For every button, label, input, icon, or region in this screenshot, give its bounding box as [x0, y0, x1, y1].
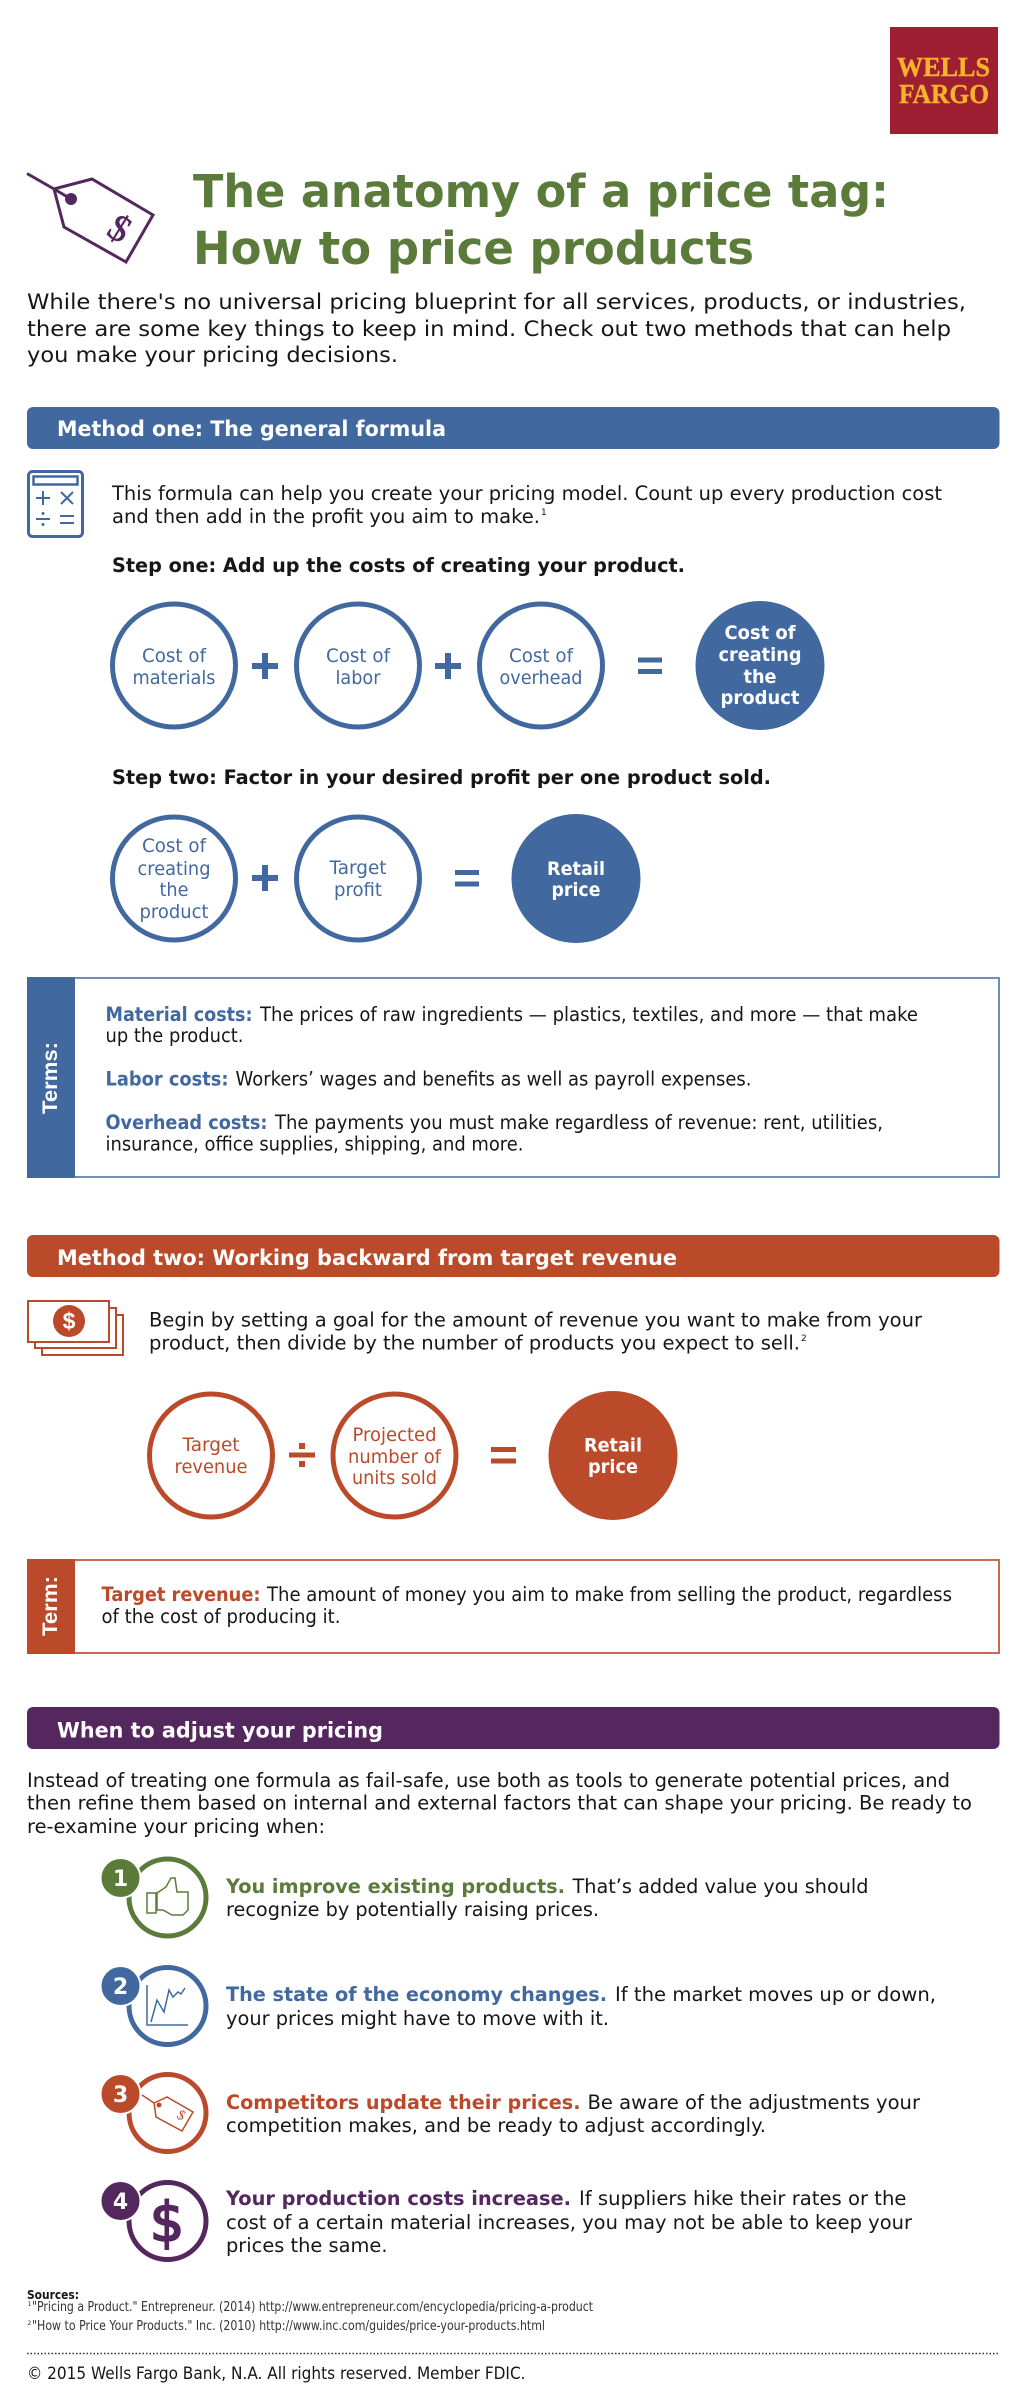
term: target revenue: The amount of money you aim to make from selling the product, regardless — [266, 1583, 952, 1606]
title — [193, 165, 889, 275]
title: The anatomy of a price tag: — [193, 165, 889, 218]
heading: when to adjust: When to adjust your pricing — [57, 1718, 383, 1742]
panel: term — [27, 1559, 999, 1654]
heading: method two: Method two: Working backward from target revenue — [57, 1246, 677, 1270]
text: cost of a certain material increases, you may not be able to keep your — [226, 2211, 913, 2234]
term: target revenue: of the cost of producing it. — [102, 1605, 340, 1628]
text: The state of the economy changes. — [226, 1983, 607, 2006]
text: You improve existing products. — [225, 1875, 565, 1898]
icon: thumbs up — [100, 1858, 206, 1936]
term: target revenue: Target revenue: — [102, 1583, 260, 1606]
plus — [252, 865, 278, 891]
method one description — [111, 482, 942, 528]
text: prices the same. — [226, 2234, 388, 2257]
icon: price tag — [27, 174, 153, 262]
circle: projected number of units sold: number of — [348, 1446, 442, 1468]
term: overhead costs: Overhead costs: — [106, 1111, 268, 1134]
heading: when to adjust — [27, 1707, 1000, 1749]
circle: target revenue — [150, 1394, 272, 1517]
term: labor costs: Workers’ wages and benefits as well as payroll expenses. — [236, 1068, 752, 1090]
circle: cost of creating the product — [696, 601, 824, 730]
circle: cost of overhead — [480, 604, 602, 727]
circle: cost of labor: labor — [336, 667, 381, 689]
term: overhead costs: The payments you must make regardless of revenue: rent, utilities, — [274, 1111, 883, 1134]
circle: cost of creating the product: creating — [718, 644, 802, 666]
icon: line chart: 2 — [113, 1975, 128, 2000]
text — [226, 1983, 936, 2030]
item 2: economy changes — [100, 1966, 936, 2044]
method one description: and then add in the profit you aim to make. — [112, 505, 540, 528]
term: labor costs: Labor costs: — [106, 1068, 228, 1090]
method two description: 2 — [801, 1334, 807, 1344]
sources: 2 — [28, 2320, 32, 2327]
term: overhead costs — [106, 1111, 883, 1156]
circle: cost of creating the product: product — [140, 901, 208, 923]
method one description: This formula can help you create your pricing model. Count up every production cost — [111, 482, 942, 505]
text — [225, 2187, 913, 2257]
intro text: there are some key things to keep in mind. Check out two methods that can help — [27, 317, 951, 342]
text: Competitors update their prices. — [226, 2091, 580, 2114]
circle: cost of creating the product: the — [160, 879, 188, 901]
sources: "Pricing a Product." Entrepreneur. (2014) http://www.entrepreneur.com/encyclopedia/pricing-a-product — [32, 2300, 593, 2315]
circle: cost of creating the product: creating — [138, 858, 210, 880]
equation: step one — [112, 601, 824, 730]
circle: retail price — [512, 814, 640, 943]
equation: step two — [112, 814, 640, 943]
circle: cost of materials — [112, 604, 236, 727]
icon: money stack: $ — [63, 1308, 76, 1334]
copyright: © 2015 Wells Fargo Bank, N.A. All rights reserved. Member FDIC. — [27, 2364, 526, 2384]
title: How to price products — [193, 222, 754, 275]
item 4: production costs — [100, 2181, 913, 2260]
icon: dollar: $ — [150, 2191, 184, 2254]
circle: projected number of units sold: units sold — [352, 1467, 437, 1489]
icon: small price tag — [100, 2074, 206, 2152]
panel: terms: Terms: — [39, 1042, 62, 1114]
circle: cost of overhead: Cost of — [509, 645, 574, 667]
divide — [289, 1443, 315, 1467]
method two description — [149, 1308, 923, 1354]
text: your prices might have to move with it. — [226, 2007, 609, 2030]
circle: cost of labor — [296, 604, 420, 727]
heading: method one — [27, 407, 1000, 449]
circle: cost of creating the product: the — [744, 666, 776, 688]
method one description: 1 — [541, 508, 547, 518]
circle: cost of creating the product: Cost of — [142, 835, 207, 857]
text: competition makes, and be ready to adjust accordingly. — [226, 2114, 766, 2137]
item 1: improve products — [100, 1858, 868, 1936]
circle: target profit: profit — [334, 879, 382, 901]
icon: price tag: $ — [100, 206, 139, 252]
icon: small price tag: 3 — [113, 2083, 128, 2108]
text: recognize by potentially raising prices. — [226, 1898, 599, 1921]
sources: "How to Price Your Products." Inc. (2010) http://www.inc.com/guides/price-your-products.html — [32, 2319, 545, 2334]
circle: retail price: Retail — [547, 858, 605, 880]
intro text: you make your pricing decisions. — [27, 343, 398, 368]
adjust intro text: Instead of treating one formula as fail-safe, use both as tools to generate potential prices, and — [27, 1769, 950, 1792]
term: overhead costs: insurance, office supplies, shipping, and more. — [106, 1132, 524, 1156]
icon: line chart — [100, 1966, 206, 2044]
method two description: Begin by setting a goal for the amount of revenue you want to make from your — [149, 1308, 923, 1332]
text: If suppliers hike their rates or the — [579, 2187, 906, 2210]
text — [225, 1875, 868, 1921]
heading: method two — [27, 1235, 1000, 1277]
circle: target profit — [296, 817, 420, 940]
step two heading: Step two: Factor in your desired profit per one product sold. — [112, 766, 771, 789]
text: If the market moves up or down, — [615, 1983, 936, 2006]
circle: projected number of units sold: Projected — [352, 1424, 436, 1446]
circle: cost of overhead: overhead — [500, 667, 582, 689]
item 3: competitors — [100, 2074, 921, 2152]
text: Be aware of the adjustments your — [588, 2091, 921, 2114]
adjust intro text: re-examine your pricing when: — [27, 1815, 325, 1838]
intro text — [27, 290, 966, 368]
icon: small price tag: $ — [174, 2108, 188, 2124]
circle: retail price: Retail — [584, 1434, 642, 1456]
equals — [491, 1450, 516, 1461]
term: material costs: Material costs: — [106, 1003, 252, 1026]
text: Your production costs increase. — [225, 2187, 571, 2210]
logo: Wells Fargo: FARGO — [899, 79, 989, 109]
icon: dollar: 4 — [113, 2190, 128, 2215]
adjust intro text: then refine them based on internal and external factors that can shape your pricing. Be ready to — [27, 1792, 972, 1814]
circle: cost of labor: Cost of — [326, 645, 391, 667]
icon: calculator — [28, 472, 82, 536]
logo: Wells Fargo: WELLS — [897, 52, 990, 82]
plus — [252, 653, 278, 679]
circle: target revenue: Target — [182, 1434, 240, 1456]
icon: money stack — [28, 1301, 123, 1355]
circle: retail price: price — [588, 1456, 638, 1478]
heading: method one: Method one: The general formula — [57, 417, 446, 441]
sources: Sources: — [27, 2287, 79, 2302]
text — [226, 2091, 921, 2137]
panel: terms — [27, 977, 999, 1178]
term: material costs: up the product. — [106, 1024, 244, 1047]
method two description: product, then divide by the number of products you expect to sell. — [149, 1332, 800, 1354]
circle: cost of materials: materials — [132, 667, 216, 689]
equals — [455, 872, 479, 884]
icon: thumbs up: 1 — [113, 1867, 128, 1892]
term: material costs — [106, 1003, 918, 1047]
text: That’s added value you should — [572, 1875, 868, 1898]
circle: cost of materials: Cost of — [142, 645, 207, 667]
circle: target revenue: revenue — [174, 1456, 248, 1478]
panel: term: Term: — [39, 1576, 62, 1636]
circle: projected number of units sold — [333, 1394, 456, 1517]
term: material costs: The prices of raw ingredients — plastics, textiles, and more — that make — [259, 1003, 918, 1026]
circle: retail price — [548, 1391, 678, 1520]
sources — [27, 2287, 593, 2334]
adjust intro text — [27, 1769, 972, 1838]
circle: cost of creating the product — [112, 817, 236, 940]
equals — [638, 660, 662, 672]
sources: 1 — [28, 2301, 32, 2308]
circle: cost of creating the product: product — [720, 687, 800, 709]
logo: Wells Fargo — [890, 27, 998, 134]
intro text: While there's no universal pricing blueprint for all services, products, or industries, — [27, 290, 966, 315]
circle: retail price: price — [552, 879, 600, 901]
icon: dollar — [100, 2181, 206, 2260]
circle: cost of creating the product: Cost of — [724, 622, 796, 644]
plus — [435, 653, 461, 679]
equation: method two — [150, 1391, 678, 1520]
step one heading: Step one: Add up the costs of creating your product. — [112, 554, 685, 577]
term: target revenue — [102, 1583, 952, 1628]
circle: target profit: Target — [329, 857, 386, 879]
